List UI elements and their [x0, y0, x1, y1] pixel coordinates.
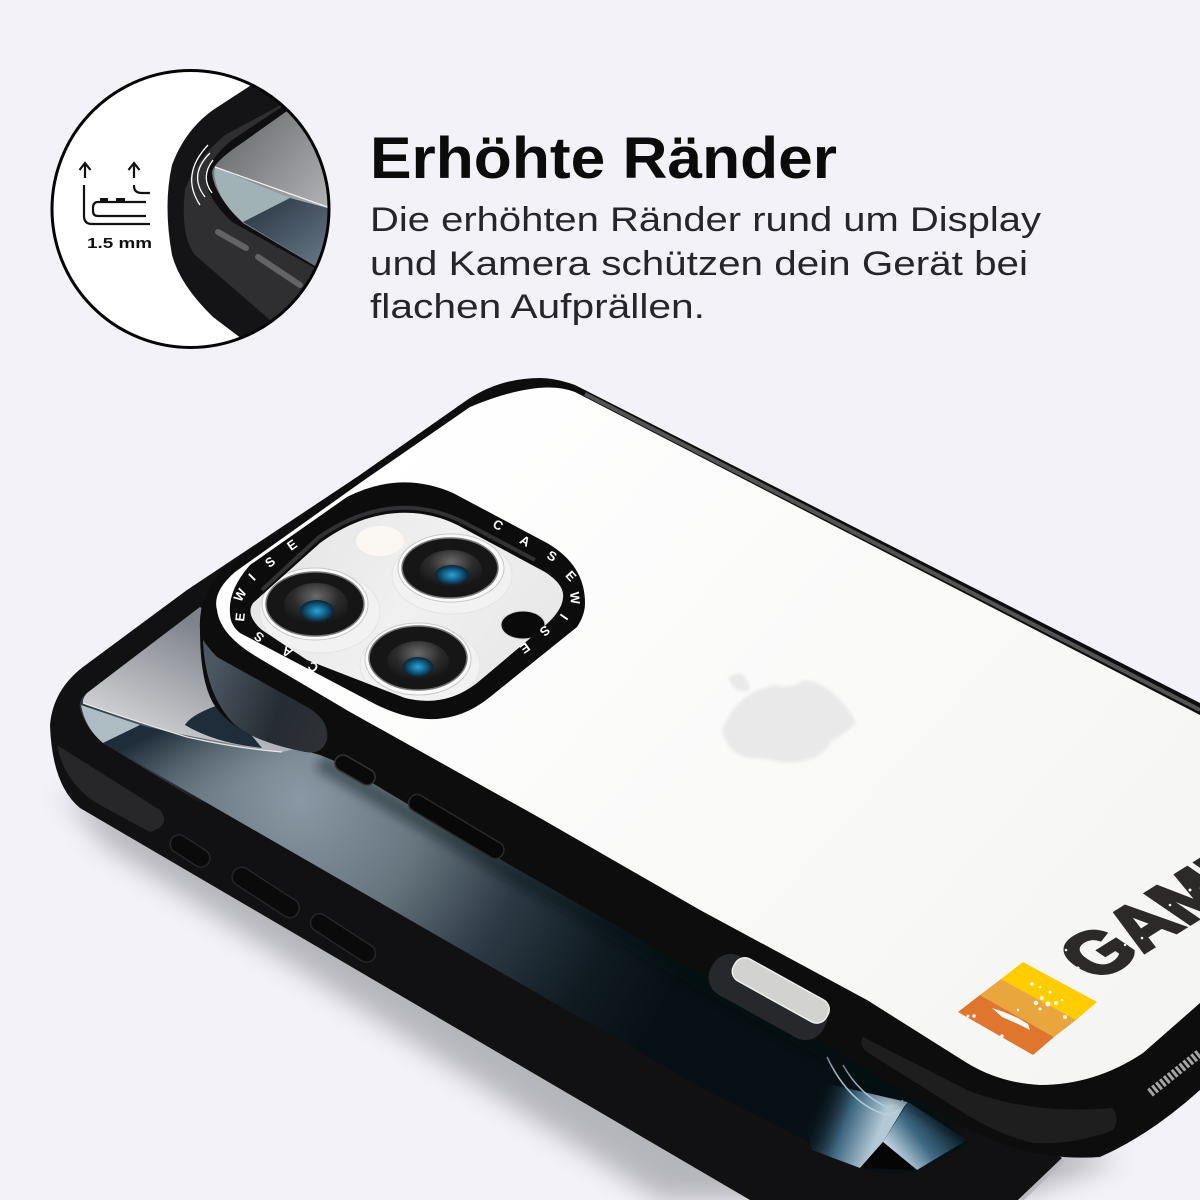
ring inner wall	[262, 508, 535, 590]
ring text: CASEWISE: C	[490, 516, 506, 534]
screen pale band	[81, 705, 140, 743]
silver button housing	[701, 947, 835, 1047]
case front patch right	[861, 1037, 1116, 1143]
ring text: CASEWISE: I	[557, 611, 571, 623]
ring text: CASEWISE: E	[563, 568, 580, 584]
mute switch	[332, 752, 378, 788]
callout: raised edge detail circle	[52, 70, 340, 348]
button: action	[167, 831, 213, 871]
lower phone bumper highlight	[57, 745, 164, 832]
impact waves	[192, 145, 213, 205]
lower phone buttons	[167, 831, 379, 966]
button: volume up	[229, 864, 303, 921]
camera lens top	[398, 534, 504, 602]
flash	[356, 526, 404, 556]
brand mark: stripes	[958, 962, 1097, 1055]
ring text: CASEWISE: A	[517, 532, 533, 550]
brand wordmark	[1064, 858, 1200, 975]
silver power button	[728, 954, 833, 1027]
ring text: CASEWISE: W	[567, 591, 583, 605]
ring text: CASEWISE: S	[251, 628, 267, 646]
front phone shadow on screen	[320, 762, 960, 1128]
wallpaper curved lines	[827, 1057, 907, 1115]
case body	[200, 378, 1200, 1158]
screen highlight top	[83, 607, 330, 752]
ring text: CASEWISE: E	[232, 612, 248, 622]
top edge soft inner highlight	[585, 394, 1200, 710]
phone corner close-up	[168, 86, 328, 337]
ring text: CASEWISE: E	[517, 639, 533, 657]
rear phone with clear case	[50, 477, 1063, 1200]
screen dark blob	[185, 703, 262, 748]
ring text: CASEWISE: C	[305, 658, 321, 676]
lower phone screen	[80, 607, 970, 1174]
ring text: CASEWISE: S	[544, 547, 560, 565]
label: 1.5 mm: 1.5 mm	[87, 235, 152, 252]
ring text: CASEWISE: E	[284, 536, 300, 554]
lidar hole	[501, 611, 545, 639]
ring text: CASEWISE: W	[230, 585, 250, 604]
screen white curve	[83, 703, 282, 752]
camera lens bottom	[365, 623, 471, 695]
ring text: CASEWISE: A	[279, 643, 295, 661]
ring text: CASEWISE: S	[537, 622, 553, 640]
lens plateau rings	[260, 536, 512, 704]
case front patch left	[203, 640, 327, 752]
speaker slot	[1150, 1053, 1200, 1093]
camera lens left	[262, 568, 368, 640]
circle outline	[52, 70, 329, 348]
apple logo	[722, 674, 856, 762]
ring text: CASEWISE	[230, 516, 583, 676]
description text: Die erhöhten Ränder rund um Display	[370, 201, 1041, 239]
camera ring	[230, 482, 585, 719]
clear back panel	[216, 387, 1200, 1085]
front phone side buttons	[332, 752, 1200, 1093]
screen dark under-curve	[103, 725, 345, 840]
icon: 1.5 mm raised edge diagram	[80, 163, 150, 224]
description text: flachen Aufprällen.	[370, 288, 705, 326]
ring text: CASEWISE: S	[262, 553, 278, 571]
heading block	[370, 126, 1041, 326]
button: volume down	[307, 910, 379, 966]
ring text: CASEWISE: I	[245, 570, 259, 584]
lower phone silver edge	[1021, 1160, 1063, 1200]
description text	[370, 201, 1041, 326]
wallpaper light beams	[790, 1075, 907, 1168]
title: Erhöhte Ränder	[370, 126, 837, 191]
description text: und Kamera schützen dein Gerät bei	[370, 245, 1028, 283]
camera opening	[250, 513, 563, 701]
volume button	[406, 791, 507, 862]
floor shadow	[60, 790, 1120, 1200]
camera module	[230, 482, 585, 719]
lower phone bumper	[50, 477, 1062, 1200]
front phone with clear case	[200, 378, 1200, 1158]
